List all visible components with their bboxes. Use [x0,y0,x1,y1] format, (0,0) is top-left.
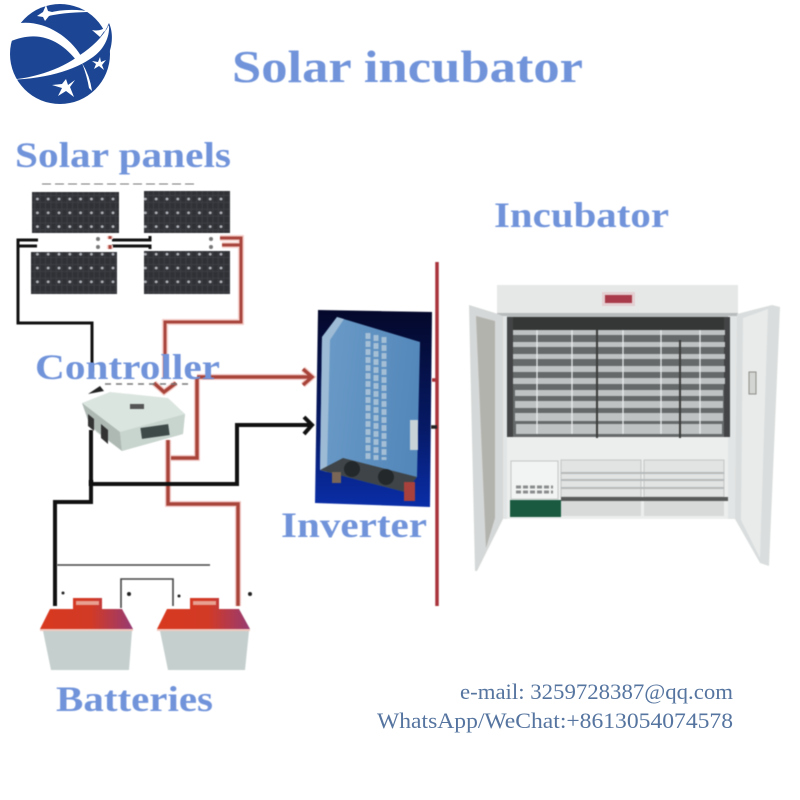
heading: controller: Controller [35,347,220,387]
icon: charge controller [82,384,190,451]
battery left [40,592,133,670]
incubator egg trays [513,330,725,434]
incubator right door [735,305,780,566]
red wire controller to battery [168,440,238,606]
heading: inverter: Inverter [281,505,427,545]
black wire controller to battery [55,480,91,606]
title: Solar incubator [232,41,583,92]
incubator tray centre posts [597,330,680,438]
black bus link [431,425,437,429]
incubator cabinet interior [497,313,738,519]
black wire controller to inverter arrow [91,417,312,484]
icon: brand logo globe [1,4,112,104]
red wire from controller to inverter arrow [154,369,312,458]
contact: email: e-mail: 3259728387@qq.com [460,679,733,704]
heading: solar panels: Solar panels [15,135,231,175]
red panel wiring [110,236,241,378]
incubator left door inner glass [476,316,495,548]
heading: batteries: Batteries [56,679,213,719]
solar panel array [31,184,230,294]
contact: whatsapp and wechat: WhatsApp/WeChat:+8613054074578 [377,708,733,733]
incubator tray hanging wires [537,330,700,434]
heading: incubator: Incubator [494,195,669,235]
red vertical bus line [432,262,437,606]
inverter device [315,310,432,507]
incubator right door inner panel [741,309,768,558]
contact details [377,679,733,733]
incubator lower hatching baskets [510,460,728,517]
incubator right door handle [749,372,756,394]
incubator top header [497,285,738,314]
battery right [157,592,252,670]
black panel wiring [18,236,150,372]
incubator machine [469,285,780,571]
thin battery link wires [57,565,210,608]
incubator left door [469,305,503,571]
